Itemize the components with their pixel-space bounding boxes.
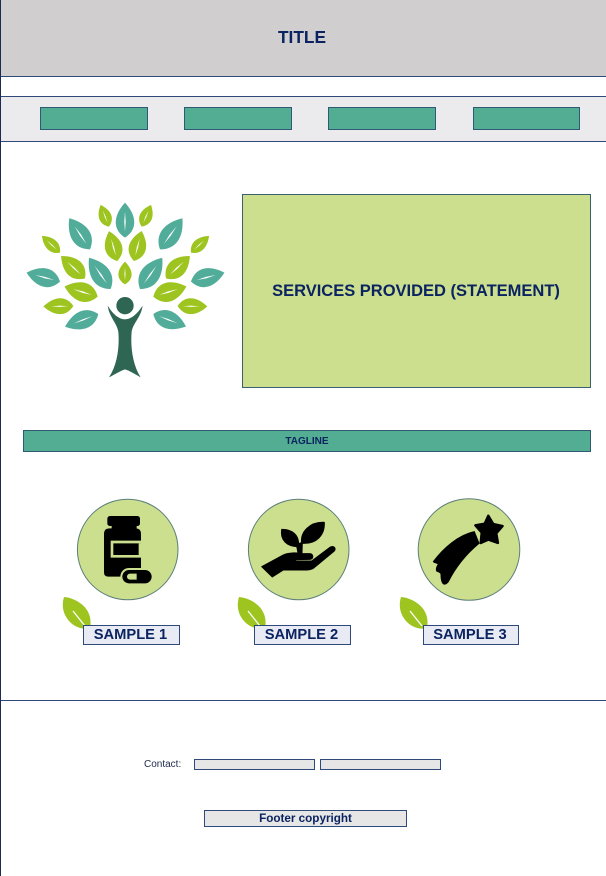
sample label 1 [83, 625, 180, 645]
panel: services statement [242, 194, 591, 388]
contact field 1 [194, 759, 315, 770]
sample label 2 [254, 625, 351, 645]
nav button 2 [184, 107, 292, 130]
footer copyright [204, 810, 407, 827]
contact field 2 [320, 759, 441, 770]
panel: services statement: SERVICES PROVIDED (STATEMENT) [272, 282, 560, 300]
icon: leaf accent 1 [62, 597, 91, 628]
sample label 1: SAMPLE 1 [94, 627, 167, 643]
icon: medicine bottle in circle [76, 498, 178, 600]
nav button 4 [473, 107, 580, 130]
sample label 2: SAMPLE 2 [265, 627, 338, 643]
navigation bar [0, 96, 606, 142]
contact label: Contact: [144, 759, 181, 770]
nav button 3 [328, 107, 436, 130]
title [0, 0, 606, 77]
tagline [23, 430, 591, 452]
icon: leaf accent 2 [238, 597, 266, 628]
icon: shooting star in circle [418, 498, 520, 601]
sample label 3: SAMPLE 3 [433, 627, 507, 643]
sample label 3 [423, 625, 519, 645]
title: TITLE [278, 26, 326, 46]
tagline: TAGLINE [285, 436, 329, 446]
icon: tree of life logo [26, 202, 224, 378]
icon: hand with plant in circle [248, 498, 350, 600]
icon: leaf accent 3 [400, 597, 428, 629]
nav button 1 [40, 107, 148, 130]
footer copyright: Footer copyright [259, 812, 352, 824]
